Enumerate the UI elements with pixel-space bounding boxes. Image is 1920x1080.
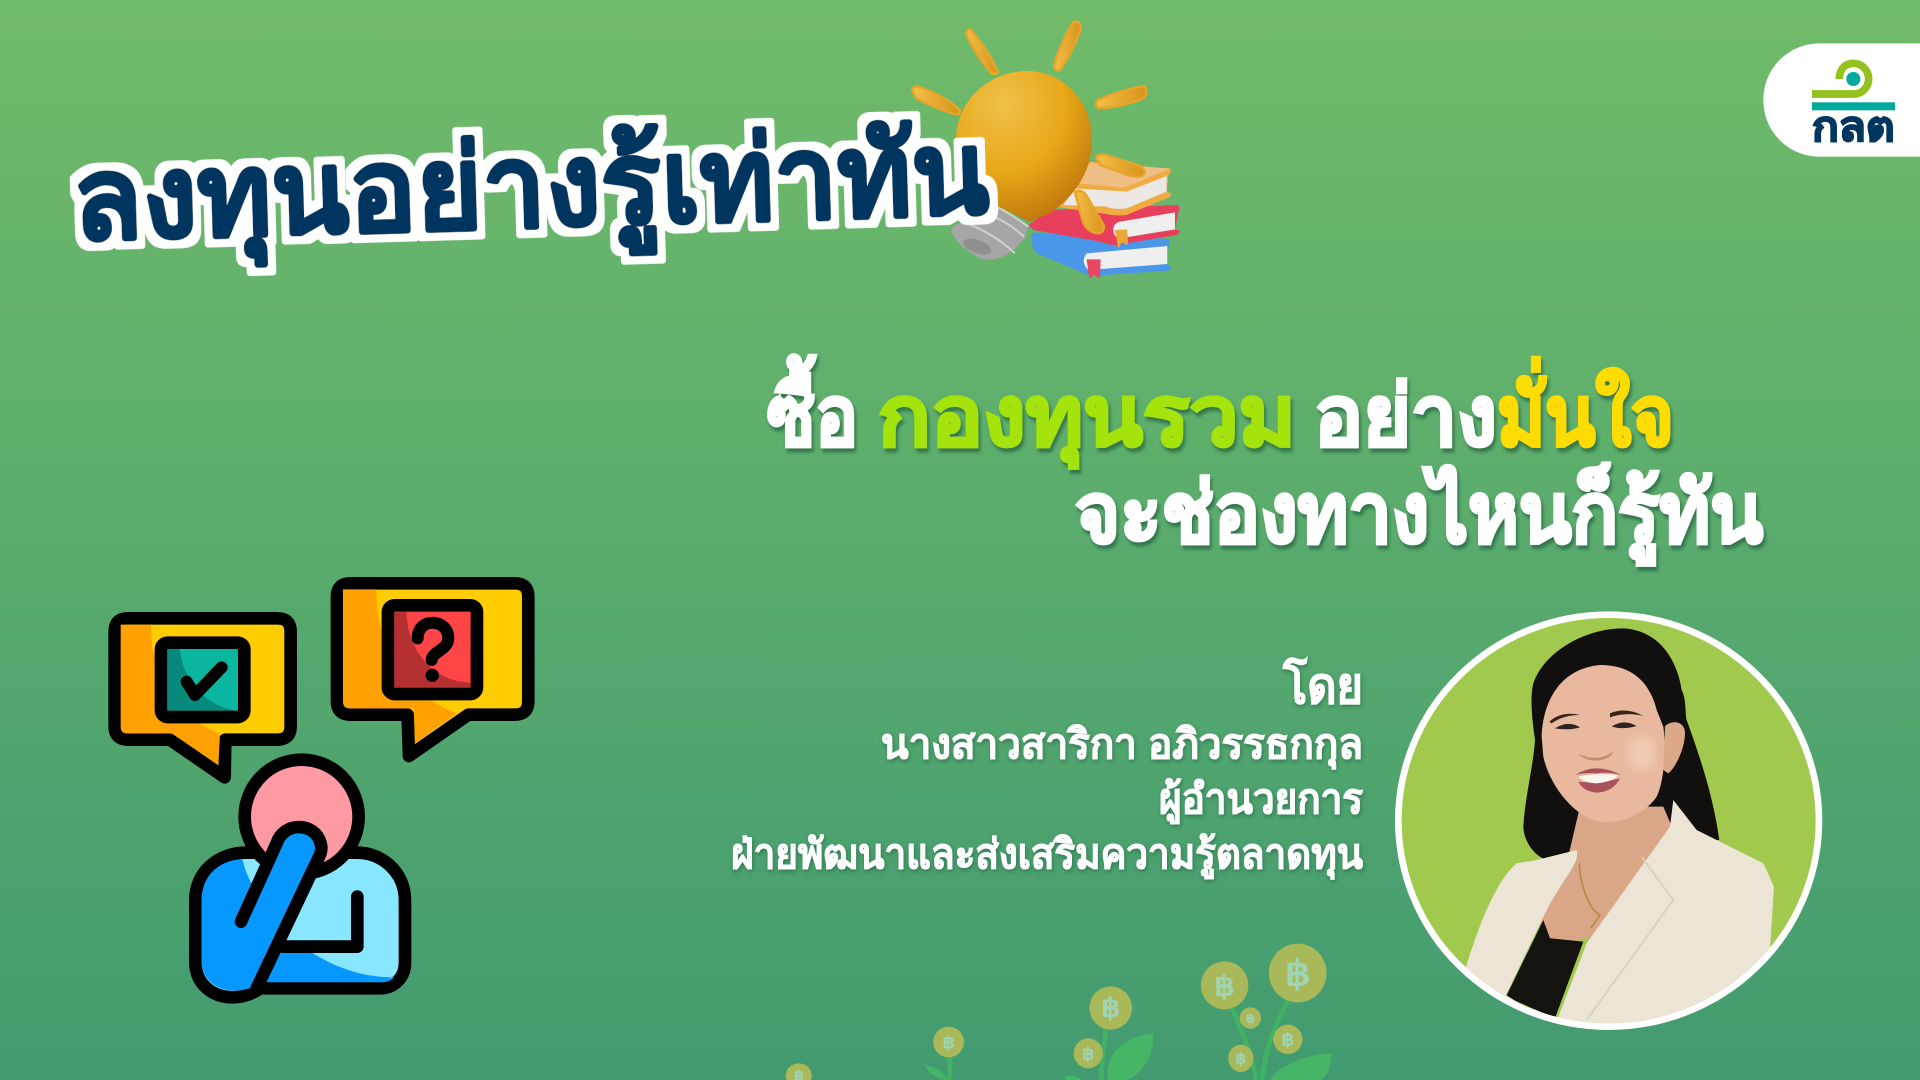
decorative coin plants: ฿ <box>1235 1051 1246 1067</box>
title: ลงทุนอย่างรู้เท่าทัน <box>71 108 991 272</box>
icon: light bulb with books <box>912 22 1179 279</box>
subtitle line one: กองทุนรวม <box>878 369 1296 469</box>
books stack <box>1028 162 1179 279</box>
subtitle line one: อย่าง <box>1314 369 1497 463</box>
portrait <box>1398 615 1819 1030</box>
speaker text: นางสาวสาริกา อภิวรรธกกุล <box>881 721 1363 770</box>
decorative coin plants: ฿ <box>1246 1011 1255 1025</box>
decorative coin plants: ฿ <box>1082 1044 1094 1063</box>
logo spiral <box>1812 63 1869 94</box>
logo bar <box>1812 102 1895 110</box>
speech bubble with check mark <box>115 618 291 777</box>
decorative coin plants <box>786 944 1331 1080</box>
logo badge <box>1763 43 1920 157</box>
bulb base <box>952 207 1028 260</box>
speaker text: โดย <box>1282 656 1363 714</box>
portrait figure <box>1466 628 1774 1030</box>
decorative coin plants: ฿ <box>1285 955 1311 994</box>
speaker text: ฝ่ายพัฒนาและส่งเสริมความรู้ตลาดทุน <box>731 831 1363 880</box>
decorative coin plants: ฿ <box>942 1032 955 1052</box>
subtitle line two: จะช่องทางไหนก็รู้ทัน <box>1075 462 1763 566</box>
white badge shape <box>1763 43 1920 157</box>
bulb glass <box>956 71 1092 222</box>
subtitle line one: มั่นใจ <box>1497 357 1674 463</box>
decorative coin plants: ฿ <box>1214 970 1235 1002</box>
icon: thinking person with speech bubbles <box>115 583 528 997</box>
subtitle line one <box>767 354 1674 469</box>
speech bubble with question mark <box>337 583 528 756</box>
logo dot <box>1846 72 1860 86</box>
logo wordmark: กลต <box>1812 104 1895 150</box>
decorative coin plants: ฿ <box>1101 994 1121 1023</box>
thinking person <box>195 760 405 997</box>
speaker text <box>731 656 1363 880</box>
speaker text: ผู้อำนวยการ <box>1159 776 1363 825</box>
bulb rays <box>912 22 1146 233</box>
portrait background circle <box>1398 615 1819 1027</box>
decorative coin plants: ฿ <box>1281 1031 1294 1050</box>
subtitle line one: ซื้อ <box>767 354 858 463</box>
